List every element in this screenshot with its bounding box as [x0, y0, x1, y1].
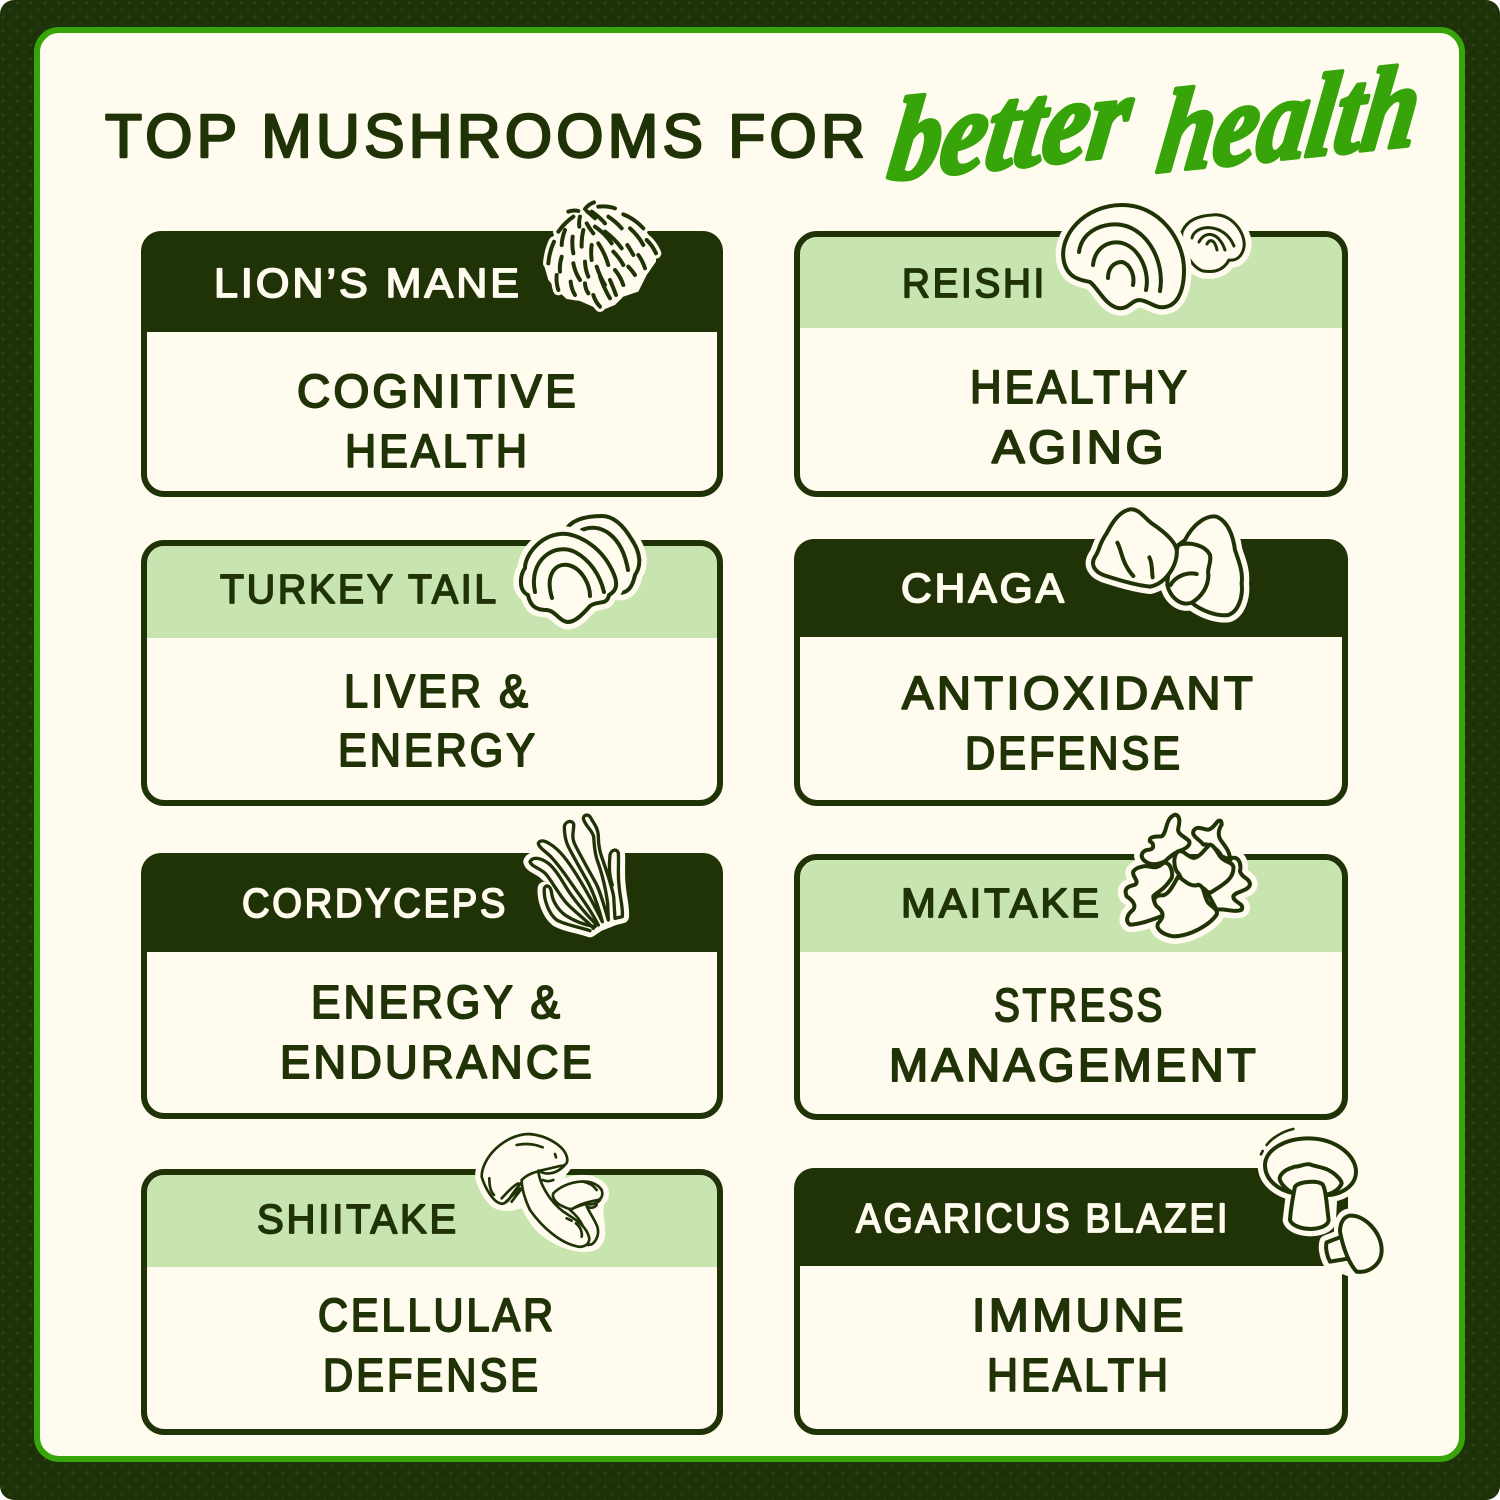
benefit: IMMUNE: [972, 1289, 1187, 1341]
benefit: LIVER &: [344, 665, 531, 717]
name: AGARICUS BLAZEI: [856, 1195, 1230, 1241]
title: script part: health: [1151, 40, 1428, 198]
icon: chaga: [1093, 509, 1242, 615]
benefit: [902, 667, 1256, 779]
benefit: ANTIOXIDANT: [902, 667, 1256, 719]
icon: shiitake: [482, 1134, 602, 1247]
benefit: STRESS: [994, 979, 1165, 1031]
benefit: [972, 1289, 1187, 1401]
benefit: [297, 365, 579, 477]
name: REISHI: [902, 260, 1047, 306]
benefit: [280, 976, 595, 1088]
benefit: HEALTH: [987, 1349, 1171, 1401]
benefit: ENERGY: [338, 724, 538, 776]
icon: cordyceps: [530, 815, 623, 931]
panel: Chaga: [794, 509, 1348, 803]
benefit: HEALTH: [345, 425, 530, 477]
name: SHIITAKE: [257, 1196, 459, 1242]
panel: Cordyceps: [141, 815, 723, 1116]
benefit: ENERGY &: [311, 976, 563, 1028]
title: script part: better: [882, 50, 1140, 206]
title: [105, 40, 1428, 206]
panel: Lion's Mane: [141, 202, 723, 494]
panel: Agaricus Blazei: [794, 1129, 1390, 1432]
name: CORDYCEPS: [242, 880, 508, 926]
icon: lion's mane: [544, 202, 656, 309]
name: CHAGA: [901, 565, 1067, 611]
panel: Turkey Tail: [144, 516, 720, 803]
benefit: CELLULAR: [318, 1289, 556, 1341]
icon: agaricus: [1261, 1129, 1390, 1272]
title: script part: [882, 40, 1428, 206]
panel: Reishi: [797, 205, 1345, 494]
name: LION’S MANE: [214, 260, 522, 306]
benefit: DEFENSE: [323, 1349, 541, 1401]
icon: reishi: [1063, 205, 1244, 308]
benefit: [318, 1289, 556, 1401]
name: MAITAKE: [901, 880, 1102, 926]
panel: Maitake: [797, 815, 1345, 1117]
icon: maitake: [1126, 815, 1250, 936]
icon: turkey tail: [521, 516, 639, 622]
benefit: ENDURANCE: [280, 1036, 595, 1088]
benefit: [889, 979, 1259, 1091]
benefit: HEALTHY: [970, 361, 1190, 413]
name: TURKEY TAIL: [220, 566, 499, 612]
panel: Shiitake: [144, 1134, 720, 1432]
benefit: MANAGEMENT: [889, 1039, 1259, 1091]
benefit: DEFENSE: [965, 727, 1183, 779]
benefit: AGING: [992, 421, 1167, 473]
benefit: COGNITIVE: [297, 365, 579, 417]
benefit: [338, 665, 538, 776]
title: plain part: TOP MUSHROOMS FOR: [105, 102, 869, 170]
benefit: [970, 361, 1190, 473]
